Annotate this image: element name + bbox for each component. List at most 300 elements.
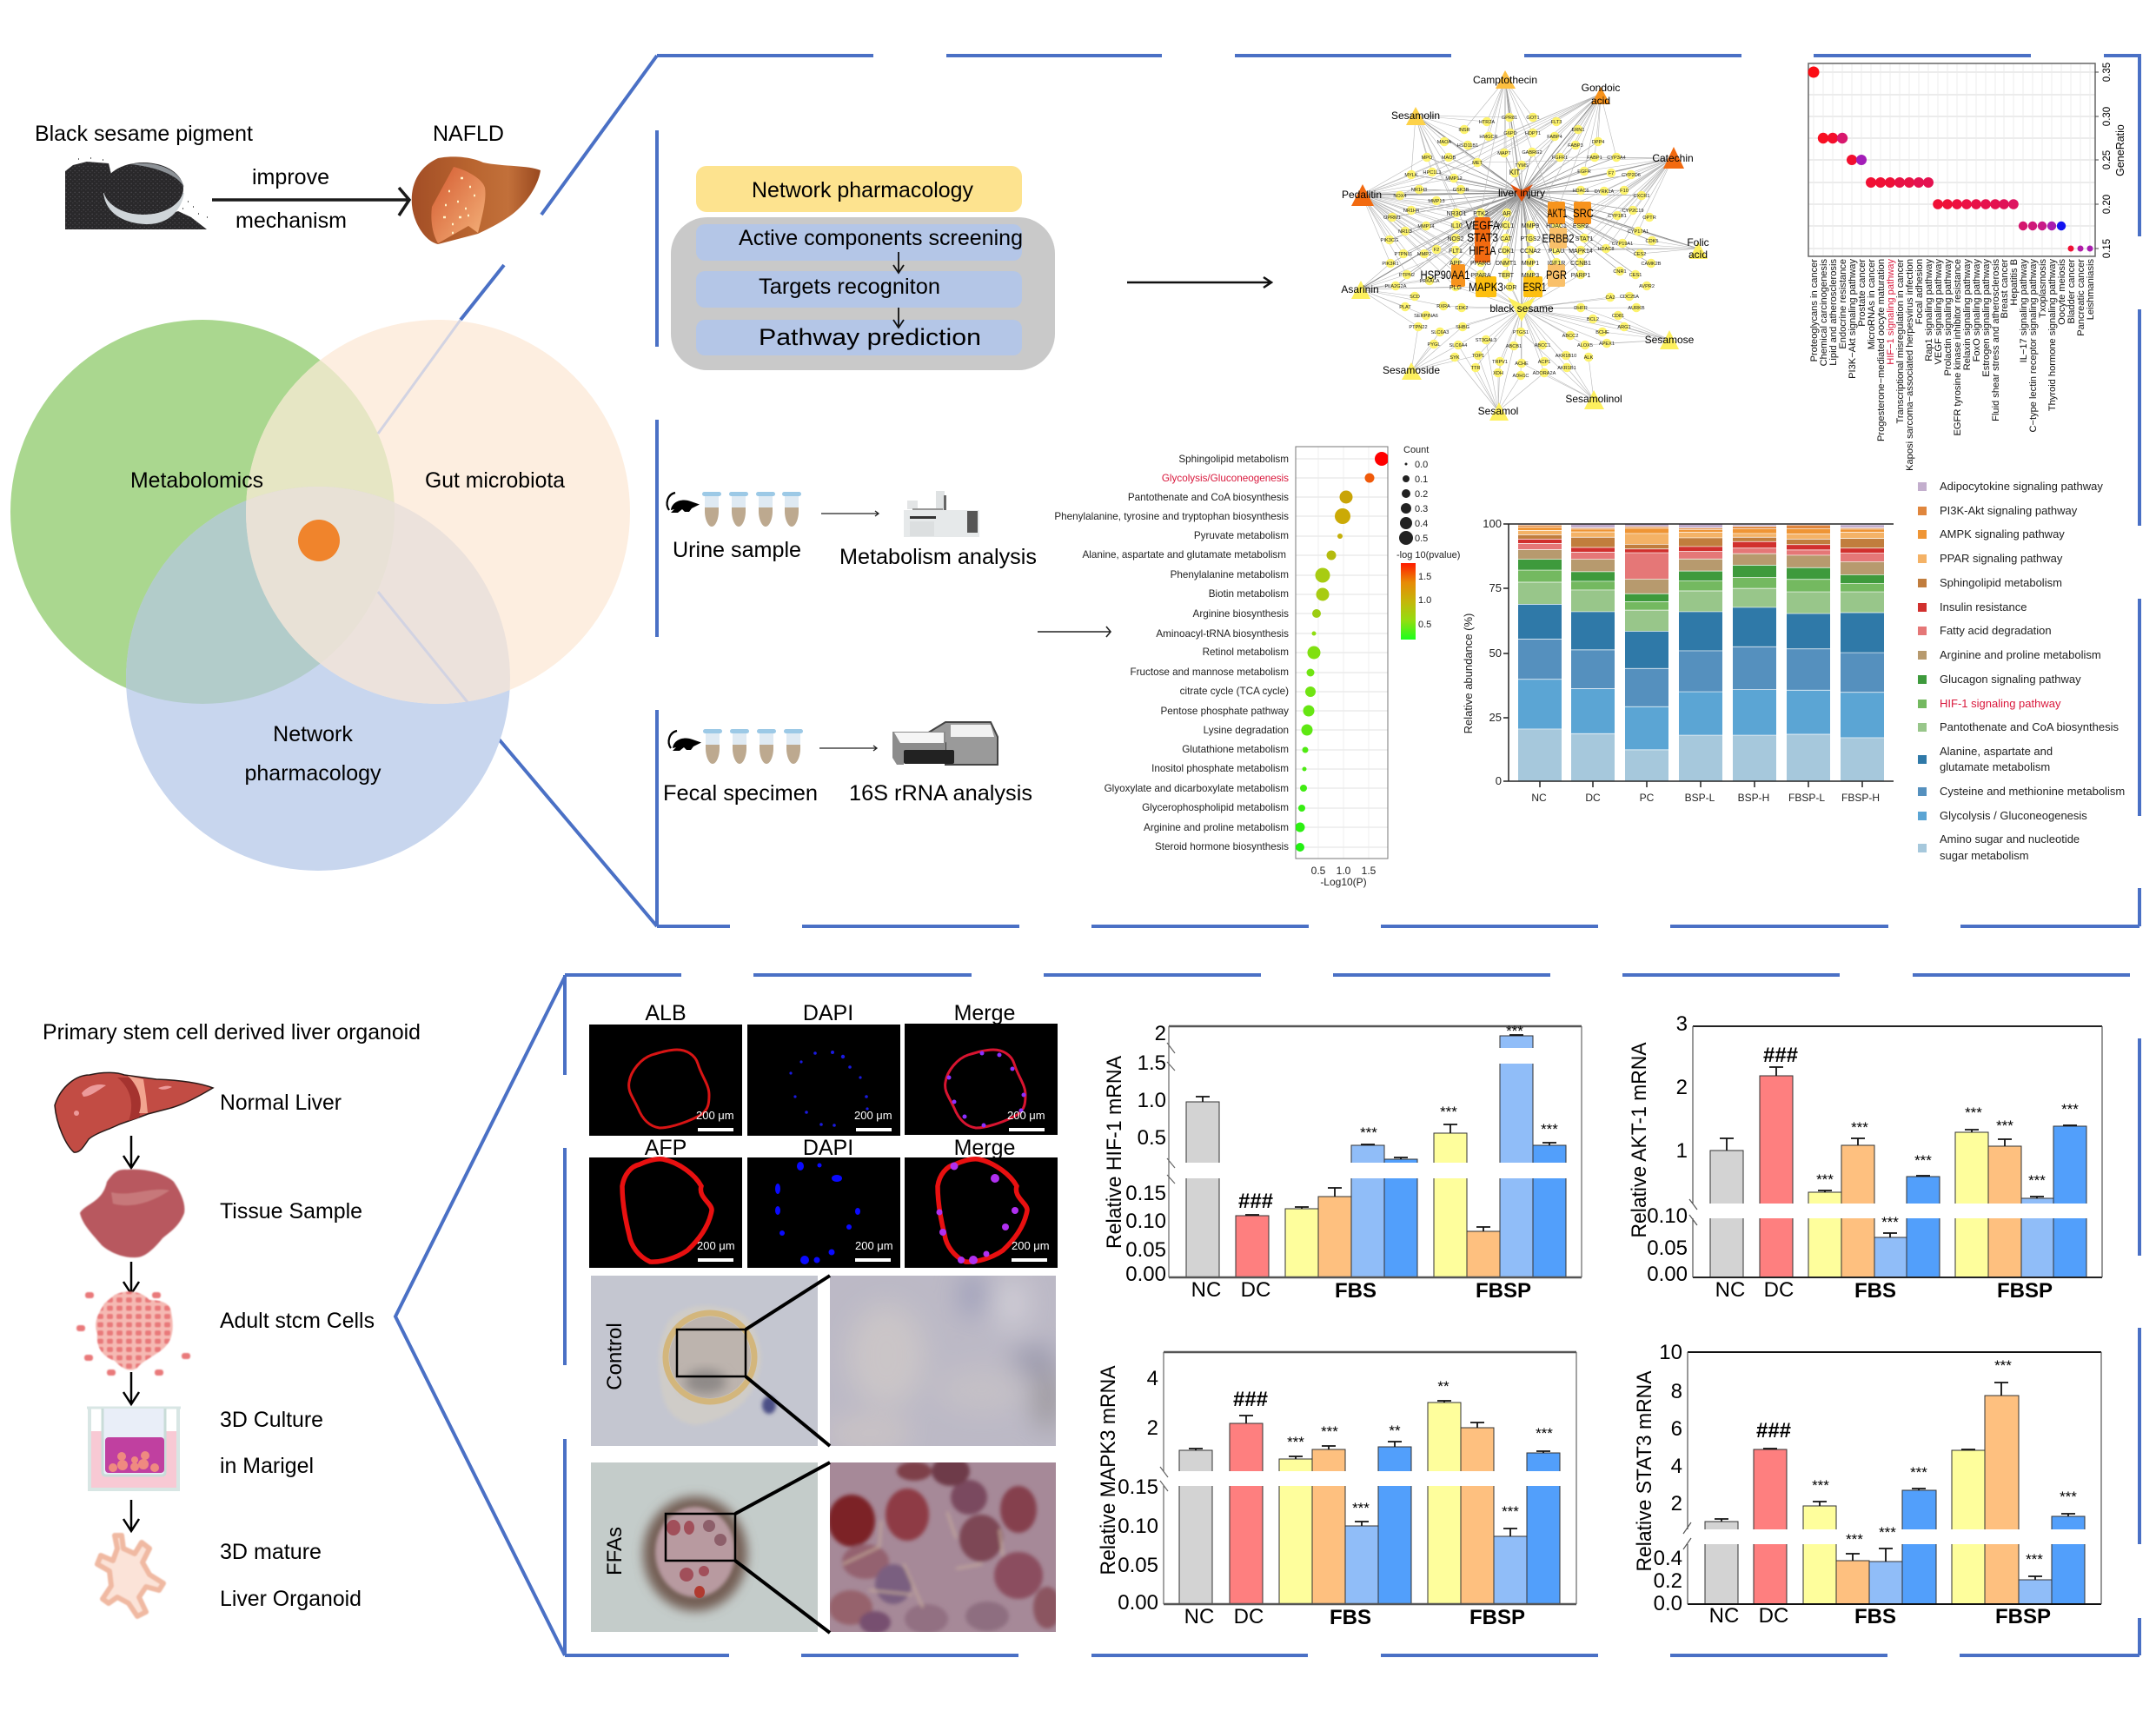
icons: urine tubes	[702, 492, 801, 527]
STAT3 y ticks: 4	[1671, 1455, 1682, 1478]
text: mechanism: mechanism	[236, 209, 347, 233]
STAT3 significance: ***	[1910, 1464, 1927, 1481]
target labels: HTR2A	[1479, 120, 1495, 125]
MAPK3 x labels: FBS	[1330, 1606, 1371, 1629]
network edges	[1360, 80, 1698, 411]
legend labels: Pantothenate and CoA biosynthesis	[1940, 720, 2119, 733]
AKT-1 y ticks: 1	[1676, 1139, 1688, 1163]
bubble plot pathway labels: Aminoacyl-tRNA biosynthesis	[1156, 628, 1289, 640]
MAPK3 x labels: DC	[1234, 1605, 1264, 1628]
AKT-1 significance: ***	[1965, 1104, 1982, 1121]
HIF-1 bars	[1186, 1036, 1566, 1277]
stacked bar segments	[1540, 524, 1862, 781]
target labels: HPC1L1	[1423, 170, 1442, 176]
STAT3 x labels: FBS	[1854, 1605, 1896, 1628]
label: urine sample: Urine sample	[673, 538, 801, 562]
STAT3 y ticks: 0.2	[1654, 1569, 1682, 1593]
target labels: SLC6A3	[1431, 330, 1449, 335]
dot plot pathway labels: Thyroid hormone signaling pathway	[2047, 259, 2058, 411]
legend swatches	[1918, 482, 1927, 852]
dot plot pathway labels: Breast cancer	[2000, 259, 2010, 318]
target labels: FABP4	[1547, 135, 1562, 140]
MAPK3 hashes: ###	[1233, 1388, 1268, 1411]
target labels: ABCC1	[1535, 343, 1550, 348]
panel: network pharmacology workflow	[671, 166, 1055, 370]
HIF-1 x labels: NC	[1191, 1278, 1221, 1302]
venn: gut microbiota circle	[246, 320, 630, 704]
legend labels: glutamate metabolism	[1940, 760, 2050, 773]
bubble plot pathway labels: Sphingolipid metabolism	[1178, 454, 1289, 465]
icon: mass spectrometer	[904, 491, 979, 537]
MAPK3 significance	[1287, 1378, 1553, 1520]
venn diagram	[10, 320, 630, 871]
target labels: F10	[1620, 189, 1629, 194]
zoom boxes and connector lines	[666, 1276, 830, 1633]
target labels: PIK3R1	[1382, 262, 1399, 267]
target labels: MMP3	[1522, 273, 1539, 279]
compound labels: Sesamoside	[1383, 364, 1440, 376]
dot plot points	[1808, 66, 2093, 252]
STAT3 x labels	[1709, 1604, 2051, 1628]
Merge nuclei row 1	[947, 1051, 1025, 1128]
Merge ring 2	[938, 1159, 1027, 1262]
target labels: AKR1B10	[1556, 354, 1576, 359]
target labels: SERPINA6	[1414, 314, 1438, 319]
bubble plot pathway labels: Lysine degradation	[1204, 725, 1289, 736]
target labels: BCL2	[1587, 317, 1599, 322]
stacked bar y labels: 100	[1483, 517, 1502, 530]
dot plot pathway labels: Endocrine resistance	[1838, 259, 1848, 349]
label: adult stem cells: Adult stcm Cells	[220, 1309, 375, 1333]
target labels: CD81	[1612, 314, 1624, 319]
STAT3 y ticks: 2	[1671, 1492, 1682, 1515]
target labels: AVPR2	[1639, 284, 1655, 289]
target labels: STAT1	[1576, 236, 1593, 242]
column labels row 2	[645, 1136, 1015, 1160]
hub target labels: ERBB2	[1542, 231, 1575, 245]
dot plot pathway labels: FoxO signaling pathway	[1972, 259, 1982, 361]
target labels: MMP9	[1522, 223, 1539, 229]
target labels: NR1H4	[1403, 209, 1419, 214]
bubble plot colour legend: -log 10(pvalue)	[1396, 550, 1460, 560]
bottom frame: dashed blue zoom outline	[395, 975, 2139, 1655]
AKT-1 y ticks	[1647, 1012, 1688, 1286]
compound triangles	[1351, 70, 1708, 421]
dot plot pathway labels: Leishmaniasis	[2086, 259, 2096, 320]
hub target labels: STAT3	[1467, 230, 1498, 244]
label: fecal specimen: Fecal specimen	[663, 781, 818, 806]
target labels: CES1	[1629, 273, 1642, 278]
label: 3D culture: 3D Culture	[220, 1408, 323, 1432]
target labels: FLT1	[1449, 249, 1463, 255]
target labels: SCD	[1410, 295, 1420, 300]
bubble plot colour legend: 1.0	[1418, 595, 1431, 606]
arrow: sesame to NAFLD	[212, 188, 409, 216]
photo: FFAs zoom	[828, 1456, 1061, 1634]
target labels: NOX4	[1393, 194, 1407, 199]
target labels: APP	[1449, 261, 1462, 267]
target labels: IGF1R	[1548, 261, 1565, 267]
target labels: BCHE	[1595, 330, 1609, 335]
photo: control zoom	[826, 1273, 1061, 1448]
target labels: FABP3	[1568, 143, 1583, 149]
hub target labels: VEGFA	[1465, 218, 1500, 232]
legend labels: Glycolysis / Gluconeogenesis	[1940, 809, 2087, 822]
STAT3 significance: ***	[1879, 1524, 1896, 1541]
target labels: MET	[1472, 161, 1483, 166]
AKT-1 significance: ***	[2028, 1172, 2046, 1189]
stacked bar x labels: NC	[1531, 792, 1547, 804]
bubble plot grid	[1296, 447, 1388, 859]
bubble plot pathway labels: Pantothenate and CoA biosynthesis	[1128, 492, 1289, 503]
legend labels: Glucagon signaling pathway	[1940, 673, 2081, 686]
network graph: compounds and targets	[1341, 70, 1709, 421]
legend: pathway colours	[1918, 480, 2125, 862]
venn: triple overlap	[246, 501, 320, 664]
venn: network pharmacology circle	[126, 487, 510, 871]
dot plot pathway labels: Oocyte meiosis	[2057, 259, 2067, 325]
legend labels: AMPK signaling pathway	[1940, 527, 2065, 540]
target labels: OPRM1	[1383, 216, 1401, 221]
bubble plot pathway labels: Inositol phosphate metabolism	[1151, 763, 1289, 774]
icon: tissue sample	[80, 1170, 184, 1257]
HIF-1 significance: ***	[1440, 1104, 1457, 1120]
target labels: HDAC8	[1598, 247, 1614, 252]
dot plot pathway labels: Fluid shear stress and atherosclerosis	[1991, 259, 2001, 421]
label: metabolism analysis: Metabolism analysis	[839, 545, 1037, 569]
chart: metabolic pathway bubble plot	[1054, 445, 1460, 888]
arrow: workflow to network graph	[1127, 277, 1271, 288]
icon: mature organoid	[97, 1535, 163, 1616]
AKT-1 significance: ***	[1816, 1171, 1834, 1188]
dot plot grid	[1808, 63, 2099, 256]
panel: fecal microbiota workflow	[663, 722, 1032, 806]
stacked bar y axis title: Relative abundance (%)	[1462, 613, 1475, 733]
legend labels: HIF-1 signaling pathway	[1940, 697, 2061, 710]
dot plot pathway labels: Bladder cancer	[2066, 259, 2077, 324]
target labels: PIK3CG	[1381, 238, 1398, 243]
HIF-1 x labels: FBSP	[1476, 1279, 1531, 1303]
STAT3 y title: Relative STAT3 mRNA	[1633, 1371, 1656, 1571]
dot plot pathway labels: Prolactin signaling pathway	[1943, 259, 1954, 375]
STAT3 significance: ***	[1994, 1357, 2012, 1374]
target labels: CDK1	[1498, 249, 1514, 255]
target labels: CNR1	[1613, 269, 1627, 275]
venn: metabolomics and network overlap	[126, 501, 320, 704]
AKT-1 significance: ***	[1996, 1117, 2013, 1134]
bubble plot pathway labels: Pentose phosphate pathway	[1160, 706, 1289, 717]
dot plot pathway labels: VEGF signaling pathway	[1934, 259, 1944, 364]
target labels: HDAC6	[1573, 189, 1589, 194]
step arrows	[893, 252, 904, 328]
photo: control organoid	[591, 1276, 818, 1446]
target labels: KDR	[1504, 285, 1516, 291]
Merge nuclei row 2	[937, 1163, 1018, 1264]
STAT3 significance: ***	[2060, 1489, 2077, 1505]
HIF-1 significance	[1360, 1023, 1558, 1141]
bubble plot pathway labels: Retinol metabolism	[1203, 647, 1289, 658]
target labels: ABCB1	[1506, 344, 1522, 349]
bubble plot pathway labels: Glyoxylate and dicarboxylate metabolism	[1105, 783, 1289, 794]
target labels: PLG	[1449, 285, 1462, 291]
arrow: step 2	[123, 1262, 139, 1294]
top frame: dashed blue zoom outline	[461, 56, 2139, 926]
STAT3 frame	[1688, 1352, 2101, 1604]
scale bars: 200 μm	[855, 1239, 893, 1252]
target labels: XDH	[1493, 371, 1503, 376]
image: black sesame in bowl	[65, 158, 208, 229]
compound labels: Sesamolin	[1391, 109, 1440, 122]
arrow: step 3	[123, 1372, 139, 1404]
hub target labels	[1420, 206, 1594, 294]
AKT-1 hashes: ###	[1763, 1044, 1798, 1067]
venn: centre dot	[298, 520, 340, 561]
AFP ring	[622, 1159, 712, 1262]
AKT-1 x labels: FBS	[1854, 1279, 1896, 1303]
step pills	[696, 224, 1022, 355]
STAT3 x labels: DC	[1759, 1604, 1788, 1628]
compound labels: Sesamolinol	[1565, 393, 1622, 405]
target labels: G6PD	[1503, 131, 1517, 136]
MAPK3 significance: ***	[1287, 1434, 1304, 1450]
AKT-1 significance	[1816, 1101, 2079, 1230]
target labels: GOT1	[1526, 116, 1540, 121]
target labels	[1381, 116, 1662, 379]
dot plot pathway labels: C−type lectin receptor signaling pathway	[2028, 259, 2039, 433]
legend labels: Amino sugar and nucleotide	[1940, 832, 2080, 846]
MAPK3 y ticks: 4	[1147, 1367, 1158, 1390]
legend labels: Sphingolipid metabolism	[1940, 576, 2062, 589]
HIF-1 y ticks: 0.05	[1125, 1238, 1166, 1262]
target labels: ESR2	[1573, 223, 1589, 229]
dot plot pathway labels: Focal adhesion	[1914, 259, 1925, 324]
HIF-1 significance: ***	[1360, 1124, 1377, 1141]
MAPK3 y ticks: 2	[1147, 1416, 1158, 1440]
target labels: EGFR	[1577, 169, 1591, 175]
stacked bar x labels: BSP-L	[1685, 792, 1715, 804]
target labels: CDK2	[1456, 306, 1468, 311]
bubble plot pathway labels: Phenylalanine metabolism	[1171, 569, 1289, 580]
dot plot pathway labels	[1809, 259, 2096, 471]
target labels: PTPN22	[1409, 325, 1428, 330]
AKT-1 frame	[1693, 1026, 2102, 1277]
AKT-1 frame sides and break marks	[1689, 1026, 2102, 1277]
icons: fecal tubes	[703, 729, 803, 764]
target labels: MYLK	[1404, 173, 1418, 178]
bubble plot points	[1295, 452, 1389, 852]
dot plot pathway labels: Transcriptional misregulation in cancer	[1895, 259, 1906, 424]
label: liver organoid: Liver Organoid	[220, 1587, 362, 1611]
label: gut microbiota: Gut microbiota	[425, 468, 565, 493]
target labels: MPO	[1422, 156, 1433, 161]
bubble plot count legend: 0.4	[1415, 519, 1428, 529]
ALB ring	[629, 1050, 709, 1128]
bubble plot count legend: 0.2	[1415, 489, 1428, 500]
target labels: F7	[1609, 171, 1614, 176]
dot plot pathway labels: Chemical carcinogenesis	[1819, 259, 1829, 366]
bubble plot colour legend: 0.5	[1418, 620, 1431, 630]
stacked bar x labels: FBSP-L	[1788, 792, 1825, 804]
target labels: PARP1	[1571, 273, 1590, 279]
scale bars: 200 μm	[697, 1239, 735, 1252]
HIF-1 hashes: ###	[1238, 1190, 1273, 1213]
venn: metabolomics circle	[10, 320, 395, 704]
HIF-1 significance: ***	[1506, 1023, 1523, 1039]
dot plot pathway labels: HIF−1 signaling pathway	[1886, 259, 1896, 365]
AKT-1 significance: ***	[1914, 1152, 1932, 1169]
Merge ring 1	[945, 1050, 1025, 1128]
target labels: FABP1	[1587, 156, 1602, 161]
STAT3 frame sides and break marks	[1683, 1352, 2101, 1604]
AKT-1 bars	[1710, 1076, 2086, 1277]
label: network pharmacology: Network	[273, 722, 353, 746]
heading: NAFLD: NAFLD	[433, 122, 504, 146]
chart: relative abundance stacked bars	[1462, 517, 1894, 804]
HIF-1 frame sides and break marks	[1167, 1026, 1582, 1277]
dot plot pathway labels: IL−17 signaling pathway	[2019, 259, 2029, 362]
target labels: ADORA2A	[1533, 371, 1556, 376]
icon: 3D culture well	[87, 1408, 181, 1489]
column labels row 2: Merge	[954, 1136, 1015, 1160]
target labels: CXCR1	[1634, 194, 1649, 199]
STAT3 significance: ***	[2026, 1551, 2043, 1568]
target labels: NR1I3	[1398, 229, 1412, 235]
stacked bar y labels: 25	[1489, 711, 1502, 724]
target labels: PTK2	[1473, 211, 1489, 217]
hub target labels: SRC	[1573, 206, 1594, 220]
STAT3 y ticks: 0.4	[1654, 1547, 1682, 1570]
connector traces across venn	[378, 320, 468, 702]
bubble plot count legend	[1399, 445, 1429, 545]
target labels: PRKACA	[1419, 279, 1440, 284]
bubble plot pathway labels: Steroid hormone biosynthesis	[1155, 841, 1289, 852]
target labels: GPR81	[1502, 116, 1517, 121]
legend labels: PPAR signaling pathway	[1940, 552, 2063, 565]
MAPK3 significance: **	[1437, 1378, 1449, 1395]
bubble plot x axis	[1311, 865, 1377, 888]
target labels: MAOB	[1442, 156, 1456, 161]
target labels: PTGS2	[1521, 236, 1541, 242]
MAPK3 y ticks: 0.15	[1118, 1476, 1158, 1499]
panel: oil red control and FFAs photos	[591, 1273, 1061, 1634]
label: tissue sample: Tissue Sample	[220, 1199, 362, 1224]
target labels: GABRG2	[1522, 150, 1542, 156]
bubble plot pathway labels: citrate cycle (TCA cycle)	[1180, 686, 1289, 697]
chart: MAPK3 mRNA	[1097, 1352, 1576, 1629]
black image tiles	[589, 1024, 1058, 1268]
label: in Marigel: in Marigel	[220, 1454, 314, 1478]
dot plot pathway labels: MicroRNAs in cancer	[1867, 259, 1877, 349]
target labels: PPARA	[1470, 273, 1491, 279]
MAPK3 y ticks	[1118, 1367, 1158, 1615]
target labels: PPARG	[1470, 261, 1491, 267]
chart: STAT3 mRNA	[1633, 1341, 2101, 1628]
compound labels: Sesamose	[1645, 334, 1695, 346]
bubble plot count legend: 0.0	[1415, 460, 1428, 470]
chart: HIF-1 mRNA	[1103, 1022, 1582, 1303]
target labels: PYGL	[1428, 342, 1440, 348]
legend labels: Insulin resistance	[1940, 600, 2027, 613]
STAT3 y ticks: 8	[1671, 1380, 1682, 1403]
legend labels	[1940, 480, 2125, 862]
chart: KEGG gene ratio dot plot	[1808, 63, 2126, 471]
compound labels: black sesame	[1489, 302, 1554, 315]
dot plot gene ratio axis labels: 0.35	[2102, 63, 2113, 82]
target labels: TERT	[1498, 273, 1515, 279]
dot plot pathway labels: Relaxin signaling pathway	[1962, 259, 1973, 370]
bubble plot pathway labels: Glycerophospholipid metabolism	[1142, 802, 1289, 813]
target labels: OPTR	[1642, 216, 1656, 221]
bubble plot pathway labels: Glycolysis/Gluconeogenesis	[1162, 473, 1289, 484]
MAPK3 significance: ***	[1352, 1500, 1370, 1516]
compound labels: Pedalitin	[1342, 189, 1382, 201]
workflow heading text: Network pharmacology	[752, 178, 973, 202]
MAPK3 significance: ***	[1321, 1423, 1338, 1440]
stacked bar x labels: DC	[1585, 792, 1601, 804]
bubble plot x axis: 1.0	[1337, 865, 1351, 877]
target labels: DHFR	[1574, 306, 1588, 311]
target labels: INSR	[1458, 128, 1470, 133]
compound labels: Camptothecin	[1473, 74, 1537, 86]
target labels: AR	[1503, 211, 1511, 217]
MAPK3 frame	[1164, 1352, 1576, 1604]
hub target labels: HSP90AA1	[1420, 268, 1470, 282]
AKT-1 significance: ***	[1851, 1119, 1868, 1136]
bubble plot count legend: 0.3	[1415, 504, 1428, 514]
compound labels: Asarinin	[1341, 283, 1379, 295]
target nodes	[1390, 117, 1652, 375]
target labels: CYP1B1	[1608, 214, 1627, 219]
dot plot pathway labels: Proteoglycans in cancer	[1809, 259, 1820, 361]
bubble plot pathway labels: Phenylalanine, tyrosine and tryptophan biosynthesis	[1054, 511, 1289, 522]
HIF-1 significance: ***	[1541, 1121, 1558, 1137]
target labels: ACHE	[1515, 361, 1529, 367]
target labels: MMP14	[1417, 224, 1435, 229]
target labels: ALOX5	[1577, 343, 1593, 348]
label: FFAs: FFAs	[603, 1527, 627, 1575]
STAT3 significance: ***	[1812, 1477, 1829, 1494]
scale bars	[696, 1109, 1050, 1262]
target labels: IL10	[1450, 223, 1463, 229]
stacked bar x labels	[1531, 792, 1880, 804]
hub target labels: HIF1A	[1469, 243, 1496, 257]
target labels: ABCC2	[1562, 334, 1578, 339]
bubble plot pathway labels: Arginine and proline metabolism	[1144, 822, 1289, 833]
compound labels: acid	[1688, 249, 1708, 261]
target labels: CA2	[1606, 295, 1615, 301]
workflow heading pill	[696, 166, 1022, 212]
target labels: MCL1	[1498, 223, 1514, 229]
AKT-1 y ticks: 3	[1676, 1012, 1688, 1036]
STAT3 bars	[1705, 1396, 2085, 1604]
text: improve: improve	[252, 165, 329, 189]
target labels: ALK	[1584, 355, 1594, 361]
AKT-1 x labels: FBSP	[1997, 1279, 2053, 1303]
compound labels: liver injury	[1498, 187, 1545, 199]
AKT-1 y ticks: 0.10	[1647, 1204, 1688, 1228]
HIF-1 y ticks: 0.15	[1125, 1182, 1166, 1205]
legend labels: sugar metabolism	[1940, 849, 2029, 862]
compound labels: Gondoic	[1582, 82, 1620, 94]
AKT-1 x labels	[1715, 1278, 2053, 1303]
target labels: ADH1C	[1513, 374, 1529, 379]
target labels: AKR1B1	[1557, 366, 1576, 371]
dot plot gene ratio axis labels: 0.25	[2102, 150, 2113, 169]
target labels: CDK5	[1646, 239, 1658, 244]
panel: immunofluorescence images	[589, 1001, 1058, 1268]
STAT3 x labels: NC	[1709, 1604, 1739, 1628]
target labels: CAMK2B	[1641, 262, 1662, 267]
